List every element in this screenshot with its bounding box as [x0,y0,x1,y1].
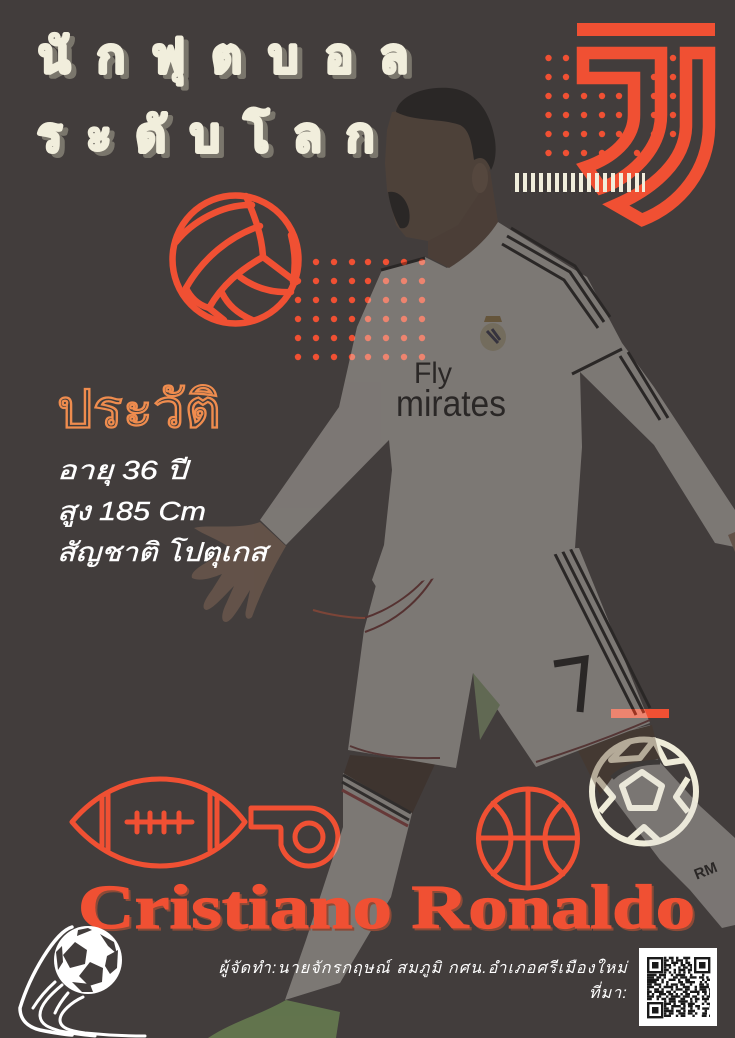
icon: whistle [251,808,338,866]
sock lettering: RM [692,859,720,884]
credit text [219,958,629,1002]
club badge [480,316,506,351]
QR code [639,948,717,1026]
title: world class footballers: ระดับโลก [42,111,403,165]
biography details: อายุ 36 ปี [57,455,191,486]
shoulder and sleeve stripes [502,228,610,328]
left hand [192,522,286,622]
biography details: สัญชาติ โปตุเกส [57,537,272,568]
shirt text [396,357,506,424]
title: world class footballers: ระดับโลก [37,107,398,161]
title: world class footballers [37,29,440,165]
shirt text: Fly [414,357,452,390]
hair [396,88,496,170]
credit text: ที่มา: [589,981,628,1002]
icon: soccer ball outline [592,740,696,844]
dot grid behind logo [545,55,676,156]
right hand [728,532,735,552]
shirt text: mirates [396,383,506,424]
cream stripes [515,173,645,192]
heading: biography: ประวัติ [57,381,221,439]
player photo [192,88,735,1038]
neck and head [428,170,498,268]
right leg [579,725,735,928]
icon: volleyball [172,196,298,324]
shirt torso and arms [260,222,735,590]
shorts [348,548,650,768]
biography details: สูง 185 Cm [57,496,206,527]
title: world class footballers: นักฟุตบอล [43,33,440,89]
open mouth [388,192,410,228]
name: Cristiano Ronaldo: Cristiano Ronaldo [78,874,695,942]
icon: american football [72,779,245,866]
name: Cristiano Ronaldo: Cristiano Ronaldo [80,876,697,944]
red bar above soccer ball [611,709,669,718]
credit text: ผู้จัดทำ:นายจักรกฤษณ์ สมภูมิ กศน.อำเภอศรีเมืองใหม่ [219,958,629,978]
shoe [208,1000,340,1038]
biography details [57,455,272,568]
title: world class footballers: นักฟุตบอล [38,29,435,85]
icon: flying soccer ball [20,926,145,1036]
icon: basketball [478,789,578,888]
logo: double J crest [577,23,715,220]
left leg [343,755,436,814]
dot grid near volleyball [295,259,425,360]
ear [472,163,488,193]
